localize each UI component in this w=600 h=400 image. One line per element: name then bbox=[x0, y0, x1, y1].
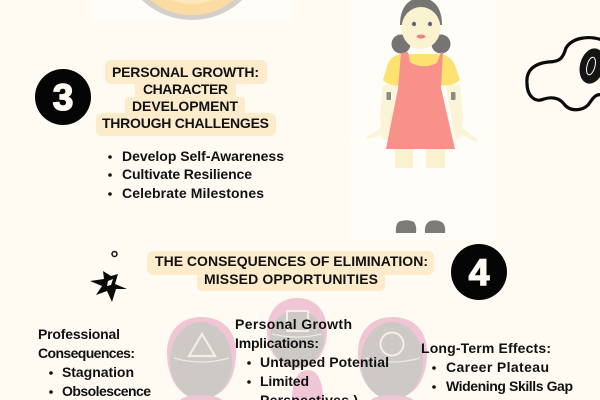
guard mask: square bbox=[267, 298, 327, 400]
number badge 3: 3 bbox=[53, 77, 73, 118]
number badge 4 bbox=[451, 244, 507, 300]
column: personal growth implications bbox=[235, 316, 389, 400]
heading: consequences of elimination: MISSED OPPORTUNITIES bbox=[204, 271, 378, 287]
bullet list: personal growth: Celebrate Milestones bbox=[122, 185, 264, 201]
scribble cloud doodle bbox=[527, 38, 600, 110]
column: personal growth implications: Untapped Potential bbox=[260, 354, 389, 370]
heading: personal growth: THROUGH CHALLENGES bbox=[102, 115, 269, 131]
column: professional consequences: Obsolescence bbox=[62, 383, 151, 399]
doll illustration bbox=[366, 0, 478, 233]
column: long-term effects: Widening Skills Gap bbox=[446, 378, 573, 394]
column: personal growth implications: Limited bbox=[260, 373, 309, 389]
column: professional consequences: Consequences: bbox=[38, 345, 135, 361]
bullet list: personal growth: Cultivate Resilience bbox=[122, 166, 252, 182]
heading: personal growth bbox=[96, 60, 276, 136]
column: long-term effects bbox=[421, 340, 596, 400]
number badge 3 bbox=[35, 69, 91, 125]
guard mask: circle bbox=[358, 317, 427, 400]
column: professional consequences bbox=[38, 326, 151, 399]
column: personal growth implications: Implications: bbox=[235, 335, 319, 351]
column: personal growth implications: Personal Growth bbox=[235, 316, 352, 332]
heading: consequences of elimination bbox=[147, 251, 434, 291]
number badge 4: 4 bbox=[469, 252, 490, 293]
star doodle bbox=[90, 252, 127, 302]
column: professional consequences: Professional bbox=[38, 326, 120, 342]
heading: consequences of elimination: THE CONSEQUENCES OF ELIMINATION: bbox=[155, 253, 428, 269]
column: long-term effects: Long-Term Effects: bbox=[421, 340, 551, 356]
column: long-term effects: Career Plateau bbox=[446, 359, 549, 375]
column: professional consequences: Stagnation bbox=[62, 364, 134, 380]
bullet list: personal growth bbox=[108, 148, 284, 201]
heading: personal growth: DEVELOPMENT bbox=[132, 98, 238, 114]
plate illustration bbox=[124, 0, 260, 20]
guard mask: triangle bbox=[167, 317, 236, 400]
heading: personal growth: CHARACTER bbox=[143, 81, 228, 97]
bullet list: personal growth: Develop Self-Awareness bbox=[122, 148, 284, 164]
heading: personal growth: PERSONAL GROWTH: bbox=[112, 64, 259, 80]
